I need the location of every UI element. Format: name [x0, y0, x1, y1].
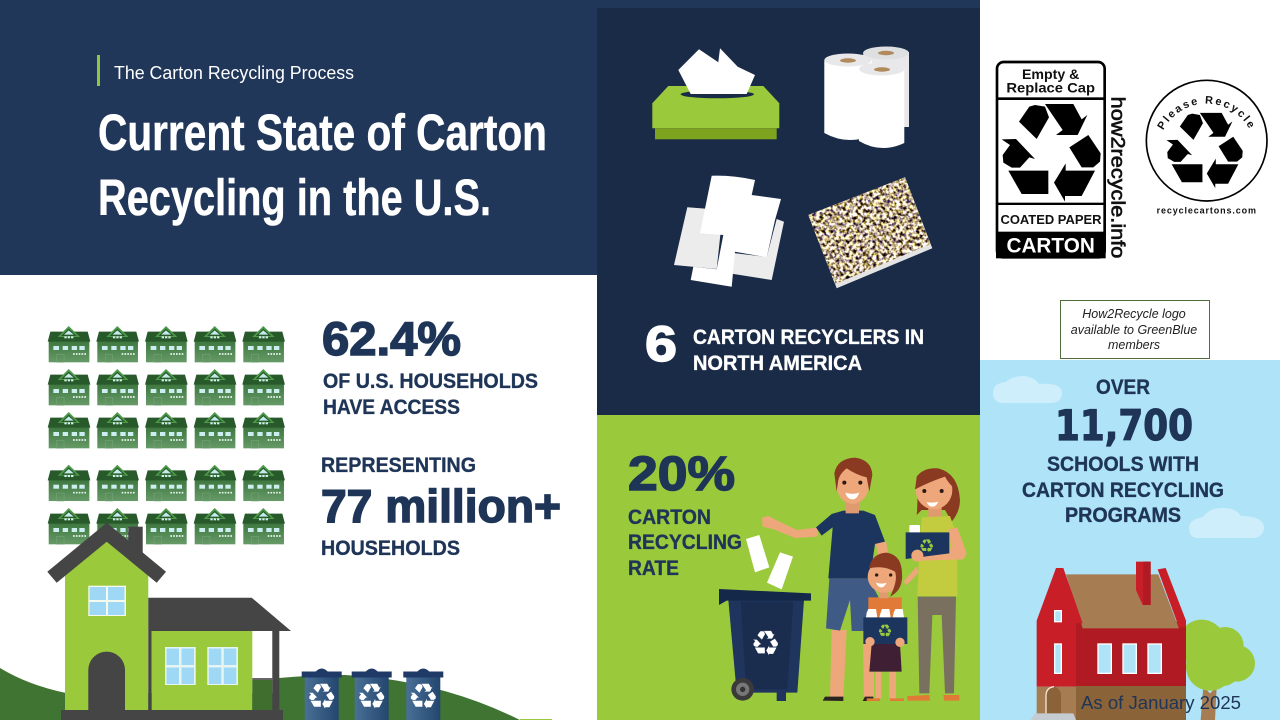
callout: logo availability: available to GreenBlue: [1071, 323, 1197, 337]
text: households: HOUSEHOLDS: [321, 537, 460, 560]
eyebrow: The Carton Recycling Process: [114, 63, 354, 83]
panel: household access: [0, 312, 561, 720]
icon: recycling bins: [302, 668, 443, 720]
text: households access: [323, 370, 538, 419]
logo: How2Recycle label: [996, 62, 1128, 258]
logo: How2Recycle label: COATED PAPER: [1000, 212, 1102, 227]
figure: girl: [863, 553, 907, 701]
footnote: date: As of January 2025: [1081, 692, 1241, 713]
illustration: school and tree: [1031, 562, 1255, 720]
icon: cloud left: [993, 376, 1062, 403]
text: carton recyclers: CARTON RECYCLERS IN: [693, 326, 924, 349]
text: carton recyclers: [693, 326, 924, 375]
accent bar: [97, 55, 100, 86]
text: households access: HAVE ACCESS: [323, 396, 460, 419]
text: carton recyclers: NORTH AMERICA: [693, 352, 862, 375]
logo: How2Recycle label: CARTON: [1006, 232, 1095, 257]
callout: logo availability: How2Recycle logo: [1082, 307, 1186, 321]
panel: carton recyclers: [597, 8, 980, 415]
panel: recycling rate: [597, 415, 980, 720]
illustration: family recycling: [719, 458, 967, 701]
stat: 62.4%: 62.4%: [322, 312, 461, 365]
text: schools with programs: [1022, 453, 1224, 527]
callout: logo availability: [1060, 300, 1210, 358]
logo: How2Recycle label: how2recycle.info: [1107, 97, 1128, 258]
text: households access: OF U.S. HOUSEHOLDS: [323, 370, 538, 393]
icon: paper towel rolls: [824, 46, 909, 148]
text: schools with programs: CARTON RECYCLING: [1022, 479, 1224, 502]
stat: 77 million+: 77 million+: [321, 480, 561, 532]
text: schools with programs: SCHOOLS WITH: [1047, 453, 1199, 476]
illustration: green house: [47, 523, 291, 720]
logo: Please Recycle: [1146, 80, 1268, 216]
panel: schools: [980, 360, 1280, 720]
hill: [0, 668, 520, 720]
icon grid: households: [48, 326, 285, 544]
text: carton recycling rate: RECYCLING: [628, 531, 742, 554]
title: Recycling in the U.S.: [98, 169, 491, 226]
callout: logo availability: members: [1108, 338, 1160, 352]
text: carton recycling rate: [628, 506, 742, 580]
text: over: OVER: [1096, 376, 1150, 399]
text: representing: REPRESENTING: [321, 454, 476, 477]
panel: header: [0, 0, 597, 275]
title: Current State of Carton: [98, 104, 547, 161]
figure: woman: [903, 468, 967, 701]
text: schools with programs: PROGRAMS: [1065, 504, 1181, 527]
stat: 6: 6: [645, 316, 677, 372]
stat: 20%: 20%: [628, 448, 735, 501]
icon: wheeled bin: [719, 589, 811, 701]
icon: falling cartons: [746, 535, 793, 589]
logo: Please Recycle: recyclecartons.com: [1157, 206, 1256, 216]
title: [98, 104, 547, 226]
light green ground edge: [520, 719, 552, 720]
icon: paper tissues: [674, 176, 784, 287]
logo: How2Recycle label: Replace Cap: [1006, 80, 1095, 96]
logo: How2Recycle label: Empty &: [1022, 66, 1079, 82]
stat: 11,700: 11,700: [1055, 401, 1193, 450]
logo: Please Recycle: Please Recycle: [1157, 96, 1253, 130]
figure: man: [762, 458, 888, 701]
text: carton recycling rate: CARTON: [628, 506, 711, 529]
image: shredded carton material: [808, 177, 932, 288]
icon: cloud right: [1189, 508, 1264, 538]
text: carton recycling rate: RATE: [628, 557, 679, 580]
icon: tissue box: [652, 48, 779, 139]
